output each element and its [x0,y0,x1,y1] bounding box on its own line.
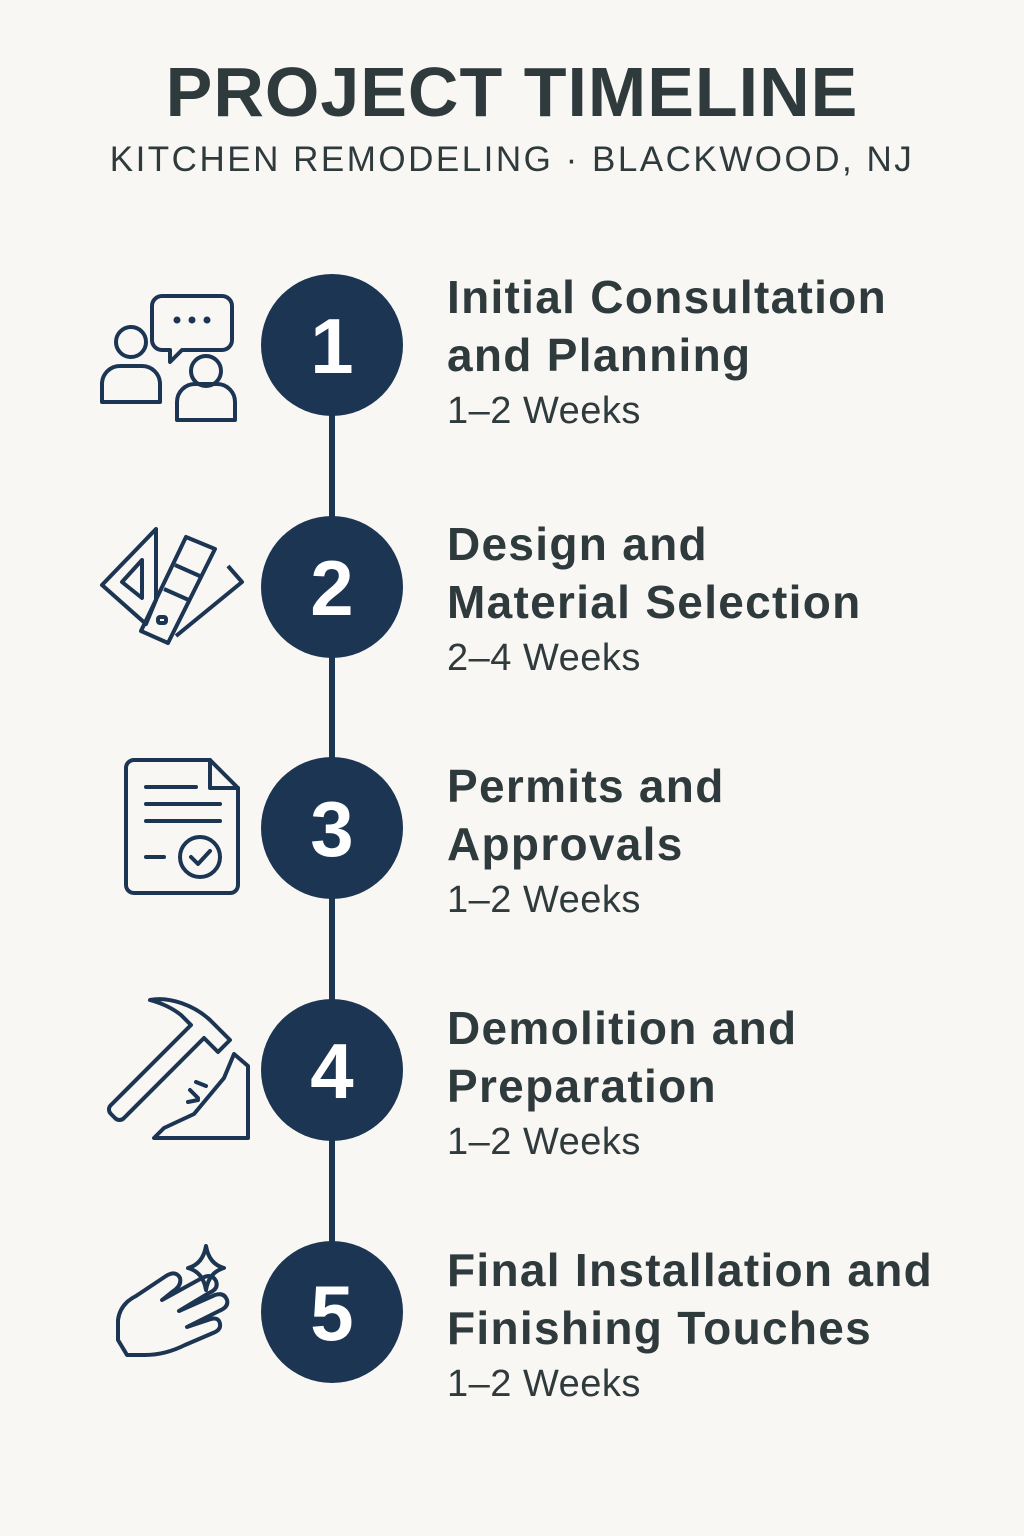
title: PROJECT TIMELINE [166,53,858,131]
step 1 text: Initial Consultation [447,271,887,323]
step 2 text [447,518,862,679]
step 4 text: 1–2 Weeks [447,1121,641,1163]
step 1 text: 1–2 Weeks [447,390,641,432]
circle 1: 1 [310,302,354,390]
step 1 text [447,271,887,432]
icon: hand with sparkle [118,1246,227,1355]
step 4 text: Demolition and [447,1002,797,1054]
circle 1 [261,274,403,416]
step 2 text: Material Selection [447,576,862,628]
icon: permit document [126,760,238,893]
step 4 text [447,1002,797,1163]
step 2 text: 2–4 Weeks [447,637,641,679]
icon: hammer demolition [109,999,248,1138]
circle 3 [261,757,403,899]
circle 4: 4 [310,1027,354,1115]
step 3 text: Approvals [447,818,684,870]
step 3 text: 1–2 Weeks [447,879,641,921]
icon: design swatches [102,529,242,643]
step 5 text: 1–2 Weeks [447,1363,641,1405]
step 4 text: Preparation [447,1060,717,1112]
subtitle: KITCHEN REMODELING · BLACKWOOD, NJ [110,140,914,179]
circle 5 [261,1241,403,1383]
step 5 text: Finishing Touches [447,1302,872,1354]
circle 2: 2 [310,544,354,632]
circle 5: 5 [310,1269,354,1357]
timeline line [329,345,335,1312]
circle 3: 3 [310,785,354,873]
circle 4 [261,999,403,1141]
step 3 text [447,760,725,921]
step 1 text: and Planning [447,329,751,381]
step 5 text [447,1244,933,1405]
circle 2 [261,516,403,658]
icon: consultation [102,296,235,420]
step 5 text: Final Installation and [447,1244,933,1296]
step 2 text: Design and [447,518,708,570]
step 3 text: Permits and [447,760,725,812]
